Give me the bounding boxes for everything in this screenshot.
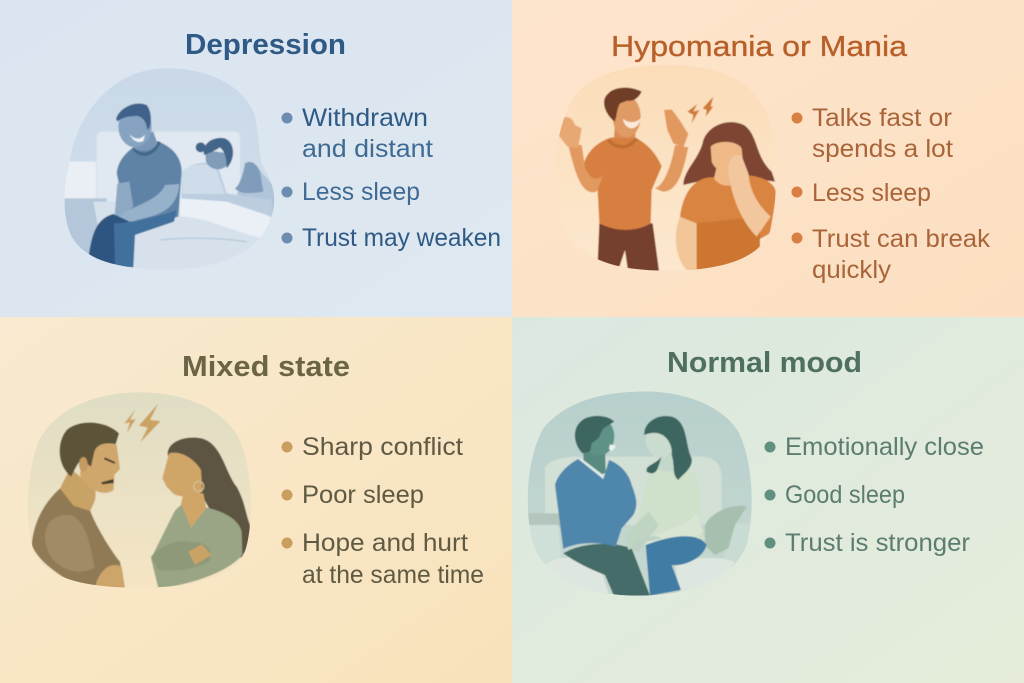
bullet list: depression: and distant (302, 135, 433, 163)
panel: mixed state (0, 317, 512, 683)
illustration: couple on sofa (528, 392, 752, 596)
bullet list: mixed: at the same time (302, 561, 484, 589)
man (563, 544, 650, 598)
bullet list: depression: Trust may weaken (302, 224, 501, 252)
man (597, 223, 659, 273)
bullet list: hypomania: quickly (812, 256, 892, 284)
man (117, 140, 182, 221)
woman (182, 163, 272, 217)
bullet list: normal mood: Emotionally close (785, 433, 984, 461)
bullet list: depression (282, 104, 501, 252)
woman (168, 437, 251, 558)
panel: normal mood (512, 317, 1024, 683)
bullet list: hypomania: Talks fast or (812, 104, 952, 132)
bullet list: hypomania (792, 104, 991, 284)
bullet list: mixed: Poor sleep (302, 481, 424, 509)
heading: Mixed state: Mixed state (182, 351, 350, 383)
bullet list: depression: Less sleep (302, 178, 420, 206)
bullet list: normal mood (764, 433, 984, 557)
heading: Normal mood: Normal mood (667, 347, 862, 379)
illustration: arguing couple (28, 392, 251, 588)
man (32, 488, 125, 588)
bullet list: normal mood: Trust is stronger (785, 529, 970, 557)
bullet list: depression: Withdrawn (302, 104, 428, 132)
bullet list: mixed (282, 433, 484, 589)
heading: Depression: Depression (185, 29, 346, 61)
bullet list: normal mood: Good sleep (785, 481, 905, 509)
woman (683, 122, 775, 185)
panel: hypomania or mania (512, 0, 1024, 317)
bullet list: hypomania: Less sleep (812, 179, 931, 207)
bullet list: mixed: Sharp conflict (302, 433, 463, 461)
lightning (124, 410, 136, 433)
bullet list: mixed: Hope and hurt (302, 529, 468, 557)
illustration: energetic man, upset woman (558, 65, 776, 270)
lightning (687, 104, 699, 123)
woman (640, 470, 704, 540)
heading: Hypomania or Mania: Hypomania or Mania (611, 31, 908, 63)
panel: depression (0, 0, 512, 317)
illustration: couple on bed, man turned away (64, 68, 274, 268)
bullet list: hypomania: spends a lot (812, 135, 953, 163)
bullet list: hypomania: Trust can break (812, 225, 991, 253)
